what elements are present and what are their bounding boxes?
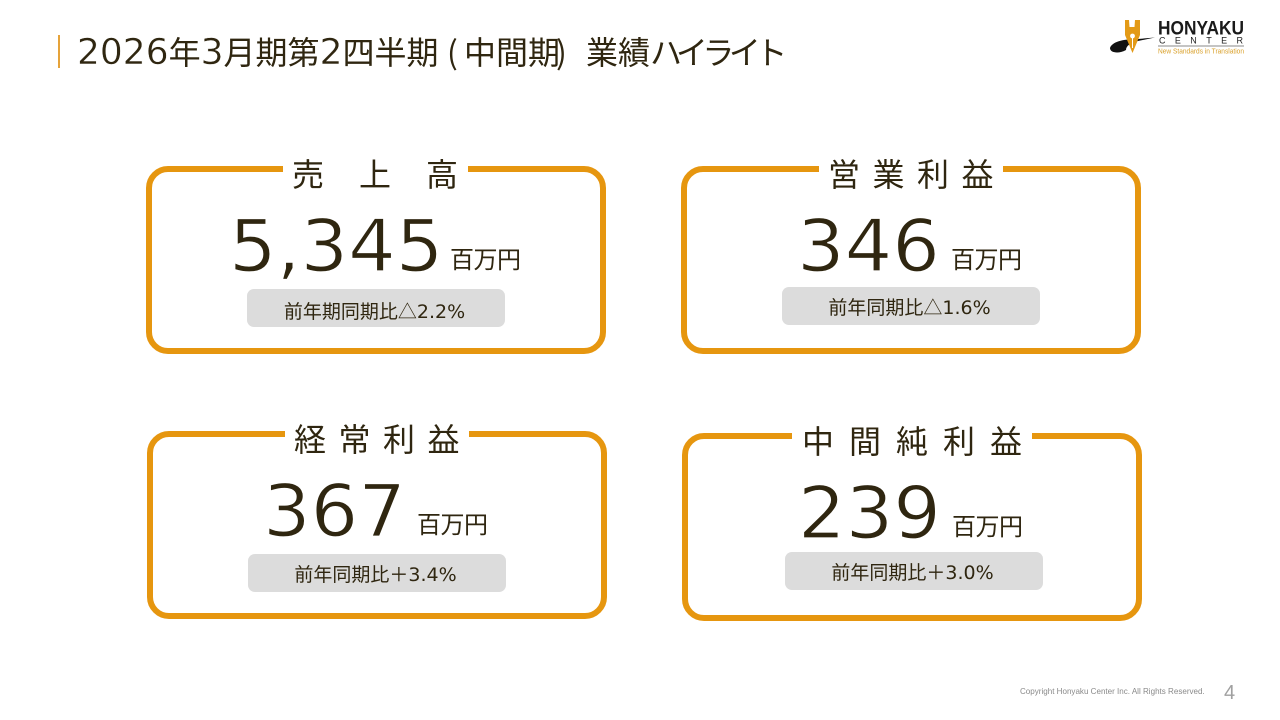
heading: 中間純利益 xyxy=(802,417,1037,463)
title: ( xyxy=(447,28,458,74)
comparison pill xyxy=(248,554,506,592)
unit: 百万円 xyxy=(450,240,520,275)
copyright: Copyright Honyaku Center Inc. All Rights Reserved. xyxy=(1020,687,1205,696)
heading: 営業利益 xyxy=(828,150,1006,196)
heading: 経常利益 xyxy=(294,415,472,461)
title: 2026年3月期第2四半期 xyxy=(77,28,438,74)
panel: 経常利益 xyxy=(147,415,607,619)
panel: 売上高 xyxy=(146,150,606,354)
comparison pill: 前年同期比＋3.0% xyxy=(831,558,994,585)
value: 5,345 xyxy=(229,204,443,288)
title: ハイライト xyxy=(650,28,782,74)
title: 中間期 xyxy=(464,28,560,74)
heading: 売上高 xyxy=(292,150,493,196)
title: 業績 xyxy=(586,28,650,74)
comparison pill xyxy=(785,552,1043,590)
page number: 4 xyxy=(1224,682,1235,704)
unit: 百万円 xyxy=(952,507,1022,542)
logo xyxy=(1110,18,1244,56)
logo wordmark xyxy=(1158,18,1244,56)
panel: 営業利益 xyxy=(681,150,1141,354)
title: ) xyxy=(556,28,567,74)
comparison pill xyxy=(782,287,1040,325)
unit: 百万円 xyxy=(417,505,488,540)
panel: 中間純利益 xyxy=(682,417,1142,621)
value: 346 xyxy=(797,204,940,288)
title xyxy=(77,28,782,74)
unit: 百万円 xyxy=(951,240,1022,275)
comparison pill: 前年同期比＋3.4% xyxy=(294,560,457,587)
comparison pill: 前年同期比△1.6% xyxy=(828,293,991,320)
value: 367 xyxy=(263,469,406,553)
value: 239 xyxy=(798,471,941,555)
comparison pill xyxy=(247,289,505,327)
title accent bar xyxy=(58,35,60,68)
logo wordmark: CENTER xyxy=(1159,36,1244,46)
icon: pen nib and swoosh xyxy=(1110,20,1155,53)
comparison pill: 前年期同期比△2.2% xyxy=(284,297,465,324)
